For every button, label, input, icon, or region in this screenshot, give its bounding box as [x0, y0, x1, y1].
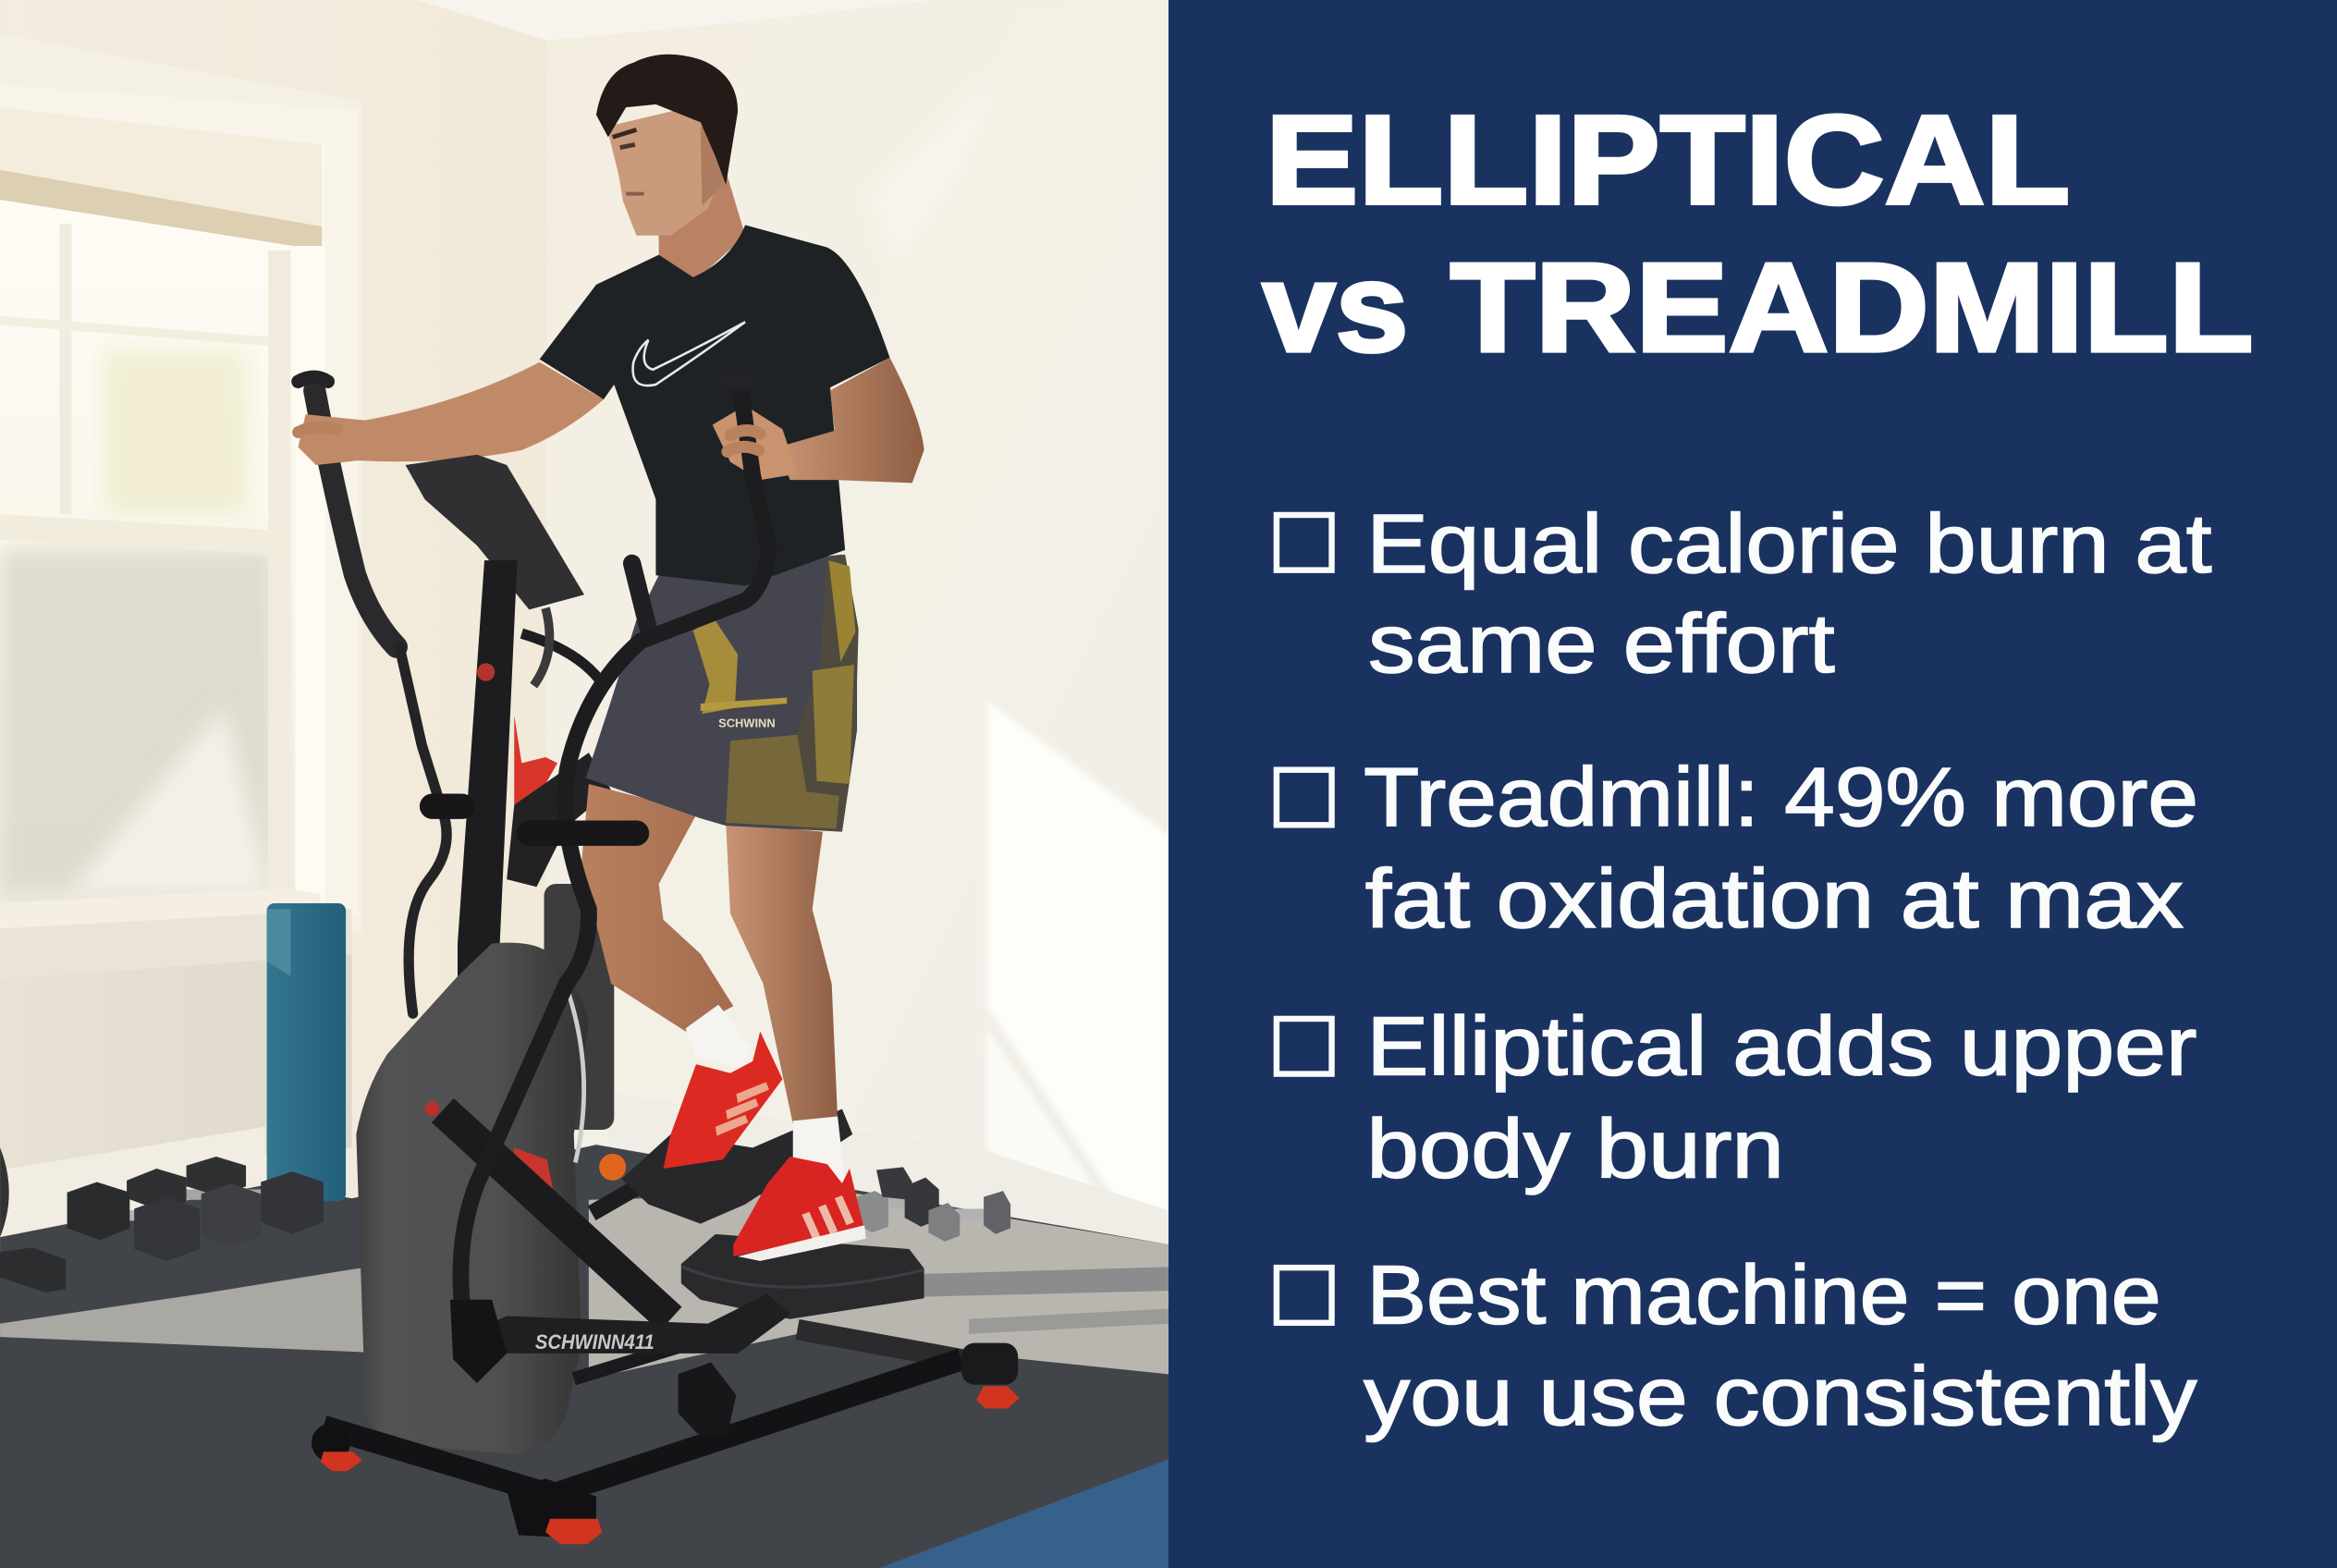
item 3	[1277, 999, 2196, 1196]
shorts	[586, 555, 857, 832]
pedal arm	[455, 1293, 790, 1354]
arm right	[778, 358, 924, 483]
item 4: Best machine = one	[1366, 1249, 2161, 1342]
icon: checkbox	[1277, 770, 1332, 825]
panel: navy text panel	[1168, 0, 2337, 1568]
front handle	[460, 390, 769, 1305]
console	[406, 455, 584, 609]
seat stem	[632, 563, 650, 635]
item 1	[1277, 497, 2212, 691]
model label: SCHWINN411	[535, 1330, 655, 1354]
main post	[458, 560, 517, 976]
title: TREADMILL	[1450, 238, 2254, 379]
base frame	[324, 1359, 961, 1495]
panel: gym room photo	[0, 0, 1168, 1568]
icon: checkbox	[1277, 1268, 1332, 1323]
item 4: you use consistently	[1364, 1350, 2196, 1443]
yoga mat	[267, 903, 346, 1201]
sunlight on wall	[986, 701, 1168, 1244]
bench foot left	[0, 1147, 66, 1292]
front shoe	[733, 1157, 866, 1261]
crossbars	[433, 806, 636, 833]
title: vs	[1263, 238, 1409, 379]
head	[596, 55, 738, 236]
skirting board	[0, 1127, 265, 1237]
rear pedal	[621, 1109, 852, 1224]
item 3: body burn	[1366, 1103, 1784, 1196]
emblem	[477, 663, 495, 681]
feet	[545, 1519, 602, 1544]
rear pedal strut	[592, 1185, 641, 1213]
frame behind seat	[507, 753, 611, 887]
item 2	[1277, 751, 2198, 946]
item 3: Elliptical adds upper	[1366, 999, 2196, 1093]
walls	[0, 0, 1168, 1252]
sun patches on floor	[0, 1267, 447, 1356]
man	[298, 55, 924, 1183]
dumbbells left	[67, 1157, 324, 1261]
shroud	[356, 943, 589, 1454]
item 2: fat oxidation at max	[1365, 852, 2184, 946]
red bottle	[514, 716, 557, 808]
front pedal	[681, 1234, 924, 1319]
title: ELLIPTICAL	[1266, 90, 2070, 231]
swoosh	[633, 322, 745, 386]
window	[0, 34, 362, 984]
dumbbells right	[857, 1167, 1010, 1242]
floor	[0, 1145, 1168, 1568]
rear handle and post	[314, 390, 447, 1013]
item 1: Equal calorie burn at	[1366, 497, 2212, 591]
arm left	[298, 362, 604, 465]
neck	[659, 176, 745, 283]
wall below window	[0, 954, 352, 1178]
sock right	[793, 1117, 845, 1183]
item 2: Treadmill: 49% more	[1364, 751, 2198, 844]
hand right	[713, 406, 798, 480]
shorts label: SCHWINN	[718, 717, 776, 730]
rear frame tubes	[798, 1329, 961, 1359]
rear post and ball	[544, 884, 614, 1130]
icon: checkbox	[1277, 515, 1332, 570]
shoe left	[663, 1032, 782, 1169]
far leg	[726, 823, 838, 1124]
icon: checkbox	[1277, 1019, 1332, 1074]
sock left	[686, 1005, 752, 1069]
fingers over grip	[298, 427, 760, 451]
torso shirt	[540, 225, 890, 586]
diagonal arm	[443, 1110, 671, 1319]
item 4	[1277, 1249, 2196, 1443]
title	[1263, 90, 2254, 379]
console arms	[521, 633, 604, 686]
item 1: same effort	[1368, 597, 1835, 691]
elliptical machine	[298, 377, 1020, 1544]
near leg	[581, 784, 733, 1032]
